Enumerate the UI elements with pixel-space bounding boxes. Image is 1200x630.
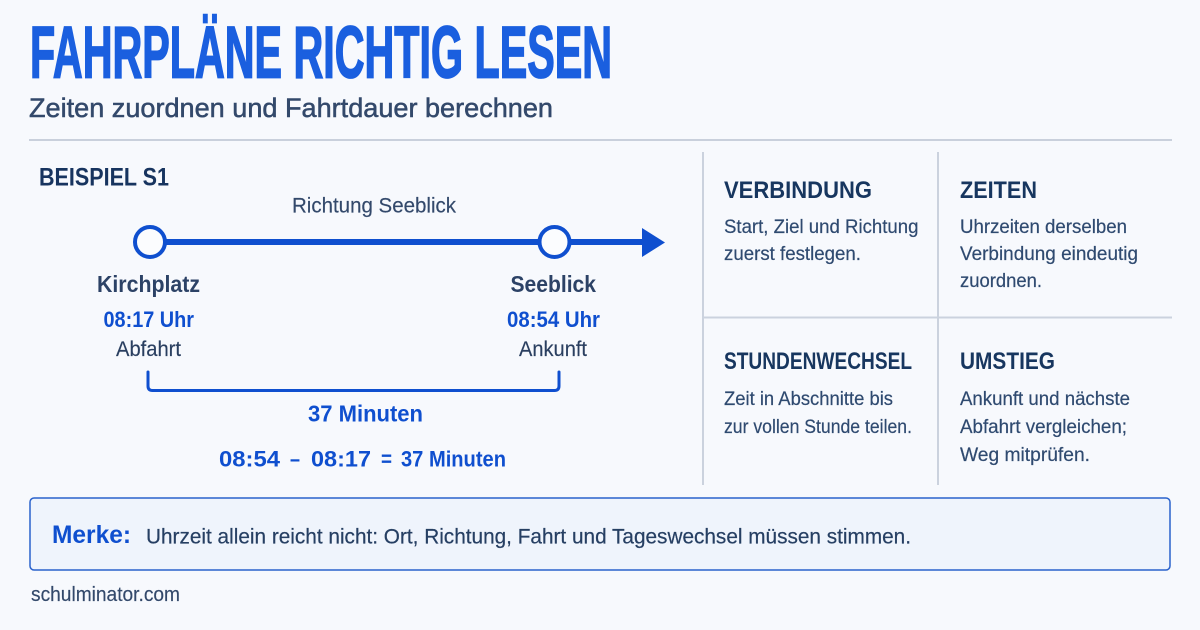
stop label: Kirchplatz: 08:17 Uhr [104,307,194,332]
panel: Zeiten: zuordnen. [960,270,1042,292]
panel: Umstieg: Ankunft und nächste [960,388,1130,410]
stop label: Kirchplatz: Kirchplatz [97,271,200,297]
subtitle: Zeiten zuordnen und Fahrtdauer berechnen [29,93,553,123]
calculation: = [381,446,392,472]
stop label: Seeblick [507,271,600,361]
panel: Stundenwechsel: STUNDENWECHSEL [724,348,912,375]
panel: Verbindung: Start, Ziel und Richtung [724,216,918,238]
callout: Merke: Merke: [52,521,131,549]
example heading: BEISPIEL S1 [39,164,169,192]
footer source: schulminator.com [31,584,180,606]
callout: Merke: Uhrzeit allein reicht nicht: Ort, Richtung, Fahrt und Tageswechsel müssen stimmen. [146,524,911,548]
icon: stop Kirchplatz [135,227,165,257]
calculation: 08:17 [311,446,371,472]
panel: Umstieg: Abfahrt vergleichen; [960,416,1127,438]
panel: example S1 [39,164,665,472]
calculation: 08:54 [219,446,281,472]
calculation [219,446,506,472]
panel: Stundenwechsel: zur vollen Stunde teilen. [724,416,912,438]
panel: Zeiten: Verbindung eindeutig [960,243,1138,265]
title: FAHRPLÄNE RICHTIG LESEN [30,12,612,94]
callout: Merke [30,498,1170,570]
stop label: Seeblick: 08:54 Uhr [507,307,600,332]
panel: Stundenwechsel: Zeit in Abschnitte bis [724,388,893,410]
stop label: Kirchplatz [97,271,200,361]
arrow: route line [150,228,665,257]
stop label: Seeblick: Ankunft [519,338,587,361]
calculation: – [290,446,300,472]
panel: Verbindung [724,177,918,265]
panel: Stundenwechsel [724,348,912,438]
panel: Zeiten: ZEITEN [960,177,1037,204]
panel: Umstieg: UMSTIEG [960,348,1055,375]
stop label: Kirchplatz: Abfahrt [116,338,181,361]
panel: Verbindung: VERBINDUNG [724,177,872,204]
duration bracket [148,372,559,390]
panel: Verbindung: zuerst festlegen. [724,243,861,265]
panel: Zeiten: Uhrzeiten derselben [960,216,1127,238]
direction label: Richtung Seeblick [292,194,456,218]
panel: Zeiten [960,177,1138,292]
calculation: 37 Minuten [401,446,506,472]
stop label: Seeblick: Seeblick [510,271,597,297]
panel: Umstieg: Weg mitprüfen. [960,444,1090,466]
panel: Umstieg [960,348,1130,466]
icon: stop Seeblick [540,227,570,257]
duration label: 37 Minuten [308,400,423,426]
